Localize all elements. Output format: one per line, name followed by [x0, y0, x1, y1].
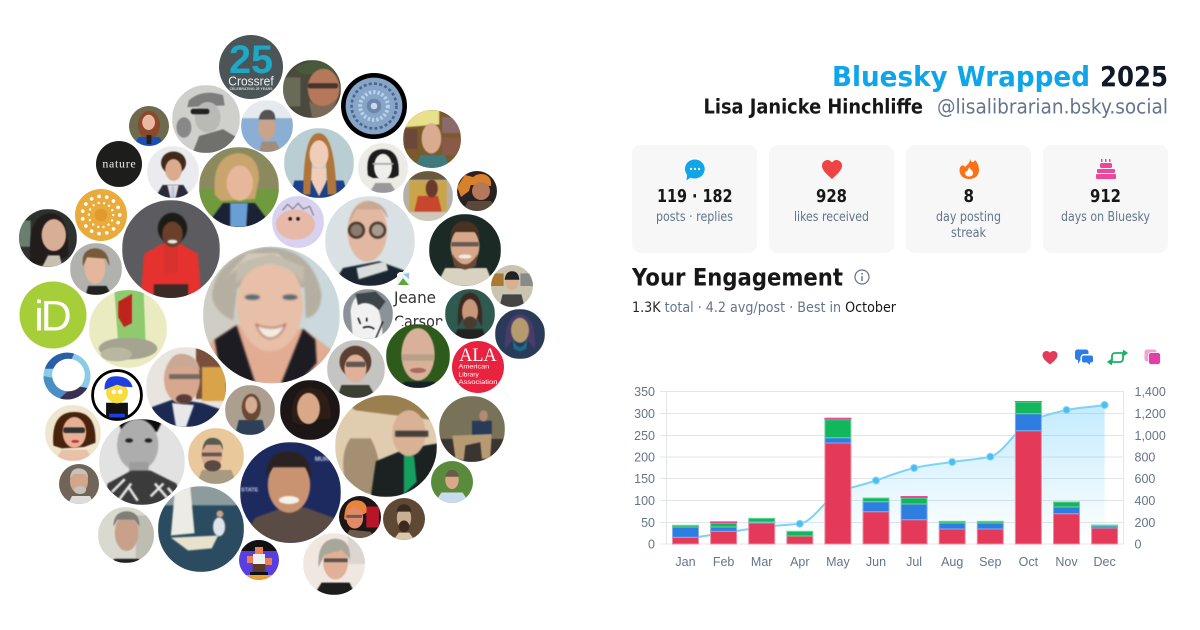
month labels: Nov: [1055, 555, 1078, 569]
avatar: Crossref 25 logo: 25: [229, 38, 273, 82]
left axis labels: 150: [634, 472, 655, 486]
left axis labels: 350: [634, 385, 655, 399]
month labels: Mar: [751, 555, 772, 569]
left axis labels: [634, 385, 655, 552]
avatar: woman with dark hair in shadow: [280, 380, 340, 440]
right axis labels: 400: [1134, 494, 1155, 508]
month labels: Apr: [790, 555, 810, 569]
right axis labels: 800: [1134, 450, 1155, 464]
avatar: man against green leaves: [431, 461, 473, 503]
avatar: pixel art character: [239, 540, 279, 581]
panel: days on Bluesky: 912: [1090, 186, 1121, 207]
month labels: Oct: [1019, 555, 1039, 569]
engagement summary: 1.3K total · 4.2 avg/post · Best in October: [632, 300, 896, 316]
month labels: Jul: [906, 555, 922, 569]
avatar: grey cartoon line drawing: [343, 289, 393, 339]
avatar: woman in red jacket: [122, 200, 220, 299]
left axis labels: 200: [634, 450, 655, 464]
panel: days on Bluesky: days on Bluesky: [1061, 210, 1150, 225]
month labels: Feb: [713, 555, 734, 569]
cumulative line: [686, 405, 1105, 539]
right axis labels: 1,000: [1134, 429, 1166, 443]
avatar: Crossref 25 logo: Crossref: [228, 74, 274, 89]
icon: replies: [1075, 350, 1093, 365]
broken image alt text: Jeane Carson: Carson: [394, 312, 444, 331]
chart: monthly engagement stacked bars with cumulative line: [634, 385, 1166, 569]
avatar: American Library Association logo: American: [459, 364, 489, 371]
panel: day posting streak: 8: [964, 186, 974, 207]
avatar: bearded man with glasses: [188, 428, 244, 484]
right axis labels: 0: [1134, 538, 1142, 552]
avatar: curly-haired woman with glasses: [327, 340, 385, 398]
right axis labels: [1134, 385, 1166, 552]
user name and handle: Lisa Janicke Hinchliffe: [704, 94, 923, 118]
avatar: man in green cap with glasses: [283, 59, 341, 118]
left axis labels: 50: [641, 516, 655, 530]
month labels: Aug: [941, 555, 963, 569]
avatar: smiling man with beard and dark background: [429, 214, 501, 286]
panel: posts and replies: [632, 145, 757, 253]
avatar: American Library Association logo: Association: [459, 379, 498, 386]
avatar: cartoon man with shelves: [491, 265, 533, 307]
user name and handle: @lisalibrarian.bsky.social: [937, 94, 1168, 118]
avatar: man on iron throne: [439, 396, 505, 462]
icon: reposts: [1108, 350, 1126, 364]
avatar: man with long hair and beard: [445, 289, 495, 339]
right axis labels: 1,400: [1134, 385, 1166, 399]
right axis labels: 1,200: [1134, 407, 1166, 421]
left axis labels: 300: [634, 407, 655, 421]
avatar: nature logo: [96, 141, 142, 187]
left axis labels: 0: [648, 538, 655, 552]
avatar: curly-haired man in suit: [147, 146, 199, 198]
avatar: man in front of bookcase: [403, 110, 461, 168]
avatar: older man with white beard: [59, 464, 99, 504]
gridlines and axes: [660, 391, 1124, 544]
panel: day posting streak: day posting: [936, 210, 1001, 225]
icon: heart: [822, 160, 842, 179]
replies bars: [672, 414, 1118, 537]
avatar: man in orange hat: [457, 171, 497, 211]
user name and handle: [704, 94, 1168, 118]
panel: posts and replies: posts · replies: [656, 210, 733, 225]
avatar: blue swirl ring logo: [43, 352, 91, 400]
avatar: American Library Association logo: [452, 341, 504, 393]
month labels: Sep: [979, 555, 1001, 569]
avatar: pencil sketch man in cap: [172, 85, 240, 153]
avatar: smiling man at Murray State backdrop: [240, 442, 341, 543]
avatar: blue tinted bearded portrait: [495, 309, 545, 359]
avatar: bald man with glasses against greenery: [386, 324, 450, 388]
avatar: South Park style character: [91, 369, 143, 421]
icon: chat bubble: [685, 159, 705, 180]
avatar: Crossref 25 logo: [219, 35, 283, 99]
avatar: bald man with round glasses: [325, 196, 415, 286]
avatar: American Library Association logo: Library: [459, 371, 479, 378]
avatar: man with glasses and goatee: [146, 347, 228, 427]
avatar: gold dotted ring logo: [75, 189, 127, 241]
month labels: May: [826, 555, 850, 569]
avatar: red-haired woman in blue jacket: [129, 106, 169, 146]
avatar: woman with dark hair and books: [19, 209, 77, 267]
avatar: sepia historical portrait: [383, 498, 425, 540]
avatar: smiling man at Murray State backdrop: STATE: [241, 487, 259, 493]
month labels: Jan: [675, 555, 696, 569]
line points: [796, 402, 1108, 527]
right axis labels: 200: [1134, 516, 1155, 530]
avatar: main portrait of Lisa: [203, 246, 340, 387]
avatar: man with mountain view: [241, 100, 293, 152]
panel: likes received: likes received: [794, 210, 869, 225]
likes bars: [672, 431, 1118, 544]
month labels: Jun: [866, 555, 886, 569]
avatar: woman with red hair and glasses: [339, 496, 381, 538]
avatar: American Library Association logo: ALA: [459, 345, 497, 366]
avatar: grey-haired man: [98, 507, 155, 563]
broken image alt text: Jeane Carson: Jeane: [393, 288, 436, 307]
avatar: sailboat on water: [158, 486, 244, 572]
cumulative area: [686, 405, 1105, 544]
month labels: [675, 555, 1116, 569]
avatar: short-haired woman smiling: [70, 243, 122, 295]
avatar: woman with long auburn hair: [284, 128, 354, 198]
left axis labels: 250: [634, 429, 655, 443]
avatar: smiling man at Murray State backdrop: MURRAY: [315, 457, 341, 463]
avatar cluster: [19, 35, 545, 595]
avatar: ink sketch of woman: [358, 143, 408, 193]
chart legend icons: [1042, 350, 1160, 365]
quotes bars: [710, 401, 1042, 523]
panel: likes received: [769, 145, 894, 253]
avatar: nature logo: nature: [102, 157, 136, 171]
icon: birthday cake: [1096, 159, 1116, 179]
title: 2025: [1100, 60, 1168, 93]
avatar: blue mandala on black: [341, 73, 407, 139]
avatar: ORCID iD logo: iD: [34, 292, 72, 340]
title: Bluesky Wrapped: [832, 60, 1090, 93]
icon: likes: [1042, 351, 1058, 364]
avatar: Crossref 25 logo: CELEBRATING 25 YEARS: [229, 87, 273, 91]
avatar: bald man with owl: [335, 395, 437, 497]
heading: Your Engagement: Your Engagement: [631, 264, 843, 292]
panel: likes received: 928: [816, 186, 847, 207]
icon: flame: [960, 159, 979, 179]
icon: info: [855, 270, 869, 284]
panel: posts and replies: 119 · 182: [657, 186, 732, 207]
avatar: blonde woman in navy blazer: [199, 147, 279, 229]
avatar: black and white portrait of a woman: [99, 419, 185, 505]
avatar: green creature with red mask: [89, 290, 167, 368]
avatar: woman in dark blazer: [225, 385, 275, 435]
broken image alt text: Jeane Carson: [393, 272, 444, 331]
right axis labels: 600: [1134, 472, 1155, 486]
avatar: woman in red jacket in frame: [403, 171, 453, 222]
avatar: ORCID iD logo: [20, 282, 86, 348]
month labels: Dec: [1093, 555, 1116, 569]
avatar: grey-haired woman with glasses: [303, 533, 367, 595]
panel: day posting streak: [906, 145, 1031, 253]
avatar: hedgehog cartoon: [272, 196, 324, 248]
reposts bars: [672, 402, 1118, 536]
left axis labels: 100: [634, 494, 655, 508]
icon: quotes: [1144, 350, 1160, 364]
panel: days on Bluesky: [1043, 145, 1168, 253]
panel: day posting streak: streak: [951, 226, 986, 241]
avatar: woman with glasses and red lips: [45, 405, 101, 461]
